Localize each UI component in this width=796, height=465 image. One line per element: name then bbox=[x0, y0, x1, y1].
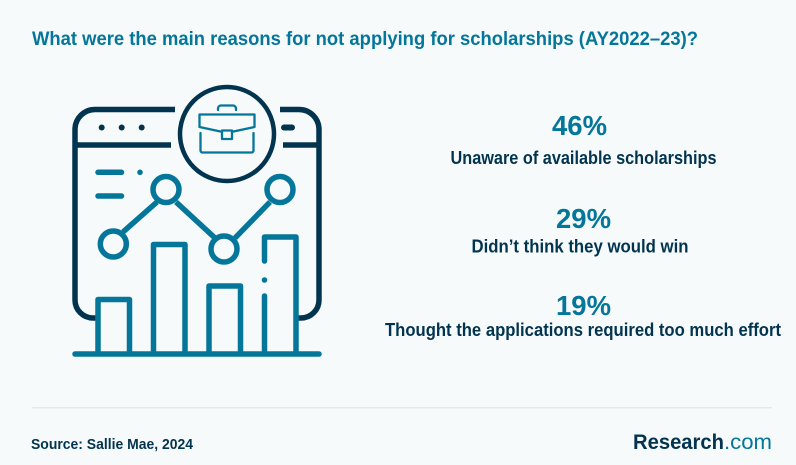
stat: 46%: Unaware of available scholarships bbox=[450, 148, 716, 168]
icon: browser window with chart and briefcase bbox=[75, 87, 319, 354]
stat: 19%: 19% bbox=[556, 290, 611, 321]
stat: 19% bbox=[385, 290, 781, 340]
footer divider bbox=[32, 407, 772, 408]
title: What were the main reasons for not applying for scholarships (AY2022–23)? bbox=[32, 28, 698, 50]
line chart bbox=[100, 176, 293, 262]
legend lines bbox=[98, 172, 122, 196]
stat: 29%: 29% bbox=[556, 203, 611, 234]
legend dot bbox=[137, 170, 143, 175]
logo: Research.com bbox=[633, 431, 772, 454]
logo: Research.com: .com bbox=[724, 431, 772, 454]
stat: 29% bbox=[472, 203, 688, 256]
briefcase badge bbox=[180, 87, 274, 181]
stat: 46% bbox=[450, 110, 716, 168]
window dots bbox=[99, 124, 145, 130]
stat: 29%: Didn’t think they would win bbox=[472, 236, 688, 256]
source: Source: Sallie Mae, 2024 bbox=[31, 436, 194, 453]
bar chart bbox=[75, 237, 319, 354]
logo: Research.com: Research bbox=[633, 431, 724, 454]
stat: 46%: 46% bbox=[552, 110, 607, 141]
window frame bbox=[75, 110, 319, 318]
